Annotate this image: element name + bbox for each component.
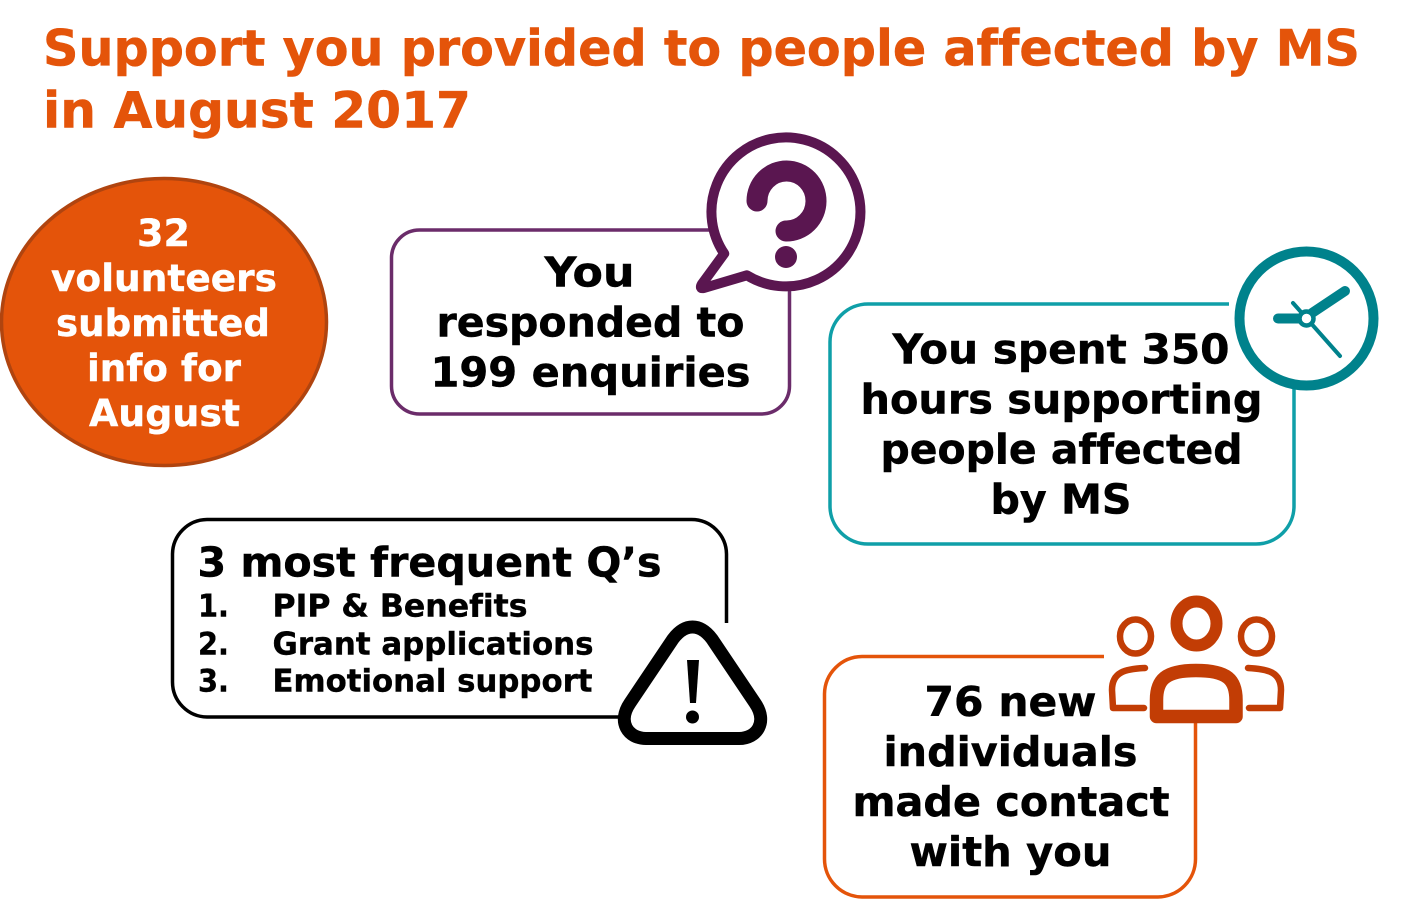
questions list: 1. bbox=[198, 588, 229, 624]
icon: group of people bbox=[1112, 602, 1281, 716]
title: Support you provided to people affected by MS bbox=[43, 20, 1360, 78]
questions list bbox=[198, 588, 594, 700]
hours text: by MS bbox=[990, 476, 1132, 524]
volunteers text bbox=[51, 212, 277, 435]
icon: warning triangle bbox=[624, 627, 761, 738]
individuals text: made contact bbox=[852, 778, 1170, 826]
enquiries text: 199 enquiries bbox=[430, 348, 750, 396]
panel: new individuals bbox=[824, 602, 1281, 897]
questions list: Emotional support bbox=[272, 664, 593, 700]
questions list: 2. bbox=[198, 626, 229, 662]
title: in August 2017 bbox=[43, 82, 471, 140]
individuals text bbox=[852, 678, 1170, 876]
individuals text: 76 new bbox=[924, 678, 1096, 726]
enquiries text bbox=[430, 248, 750, 396]
panel: enquiries bbox=[392, 137, 860, 414]
volunteers text: 32 bbox=[137, 212, 190, 255]
volunteers text: volunteers bbox=[51, 257, 277, 300]
individuals text: individuals bbox=[884, 728, 1138, 776]
icon: clock bbox=[1240, 252, 1374, 386]
enquiries text: responded to bbox=[436, 298, 744, 346]
questions heading: 3 most frequent Q’s bbox=[198, 538, 662, 586]
hours text: hours supporting bbox=[860, 376, 1262, 424]
volunteers text: info for bbox=[87, 347, 242, 390]
volunteers text: August bbox=[89, 392, 240, 435]
hours text: You spent 350 bbox=[891, 326, 1230, 374]
panel: volunteers ellipse bbox=[2, 178, 326, 466]
title bbox=[43, 20, 1360, 140]
enquiries text: You bbox=[543, 248, 634, 296]
individuals text: with you bbox=[910, 828, 1112, 876]
panel: most frequent questions bbox=[172, 520, 761, 738]
panel: hours spent bbox=[830, 252, 1374, 544]
questions list: 3. bbox=[198, 664, 229, 700]
hours text: people affected bbox=[880, 426, 1242, 474]
volunteers text: submitted bbox=[56, 302, 270, 345]
icon: question speech bubble bbox=[701, 137, 860, 288]
hours text bbox=[860, 326, 1262, 524]
questions list: PIP & Benefits bbox=[272, 588, 528, 624]
questions list: Grant applications bbox=[272, 626, 594, 662]
